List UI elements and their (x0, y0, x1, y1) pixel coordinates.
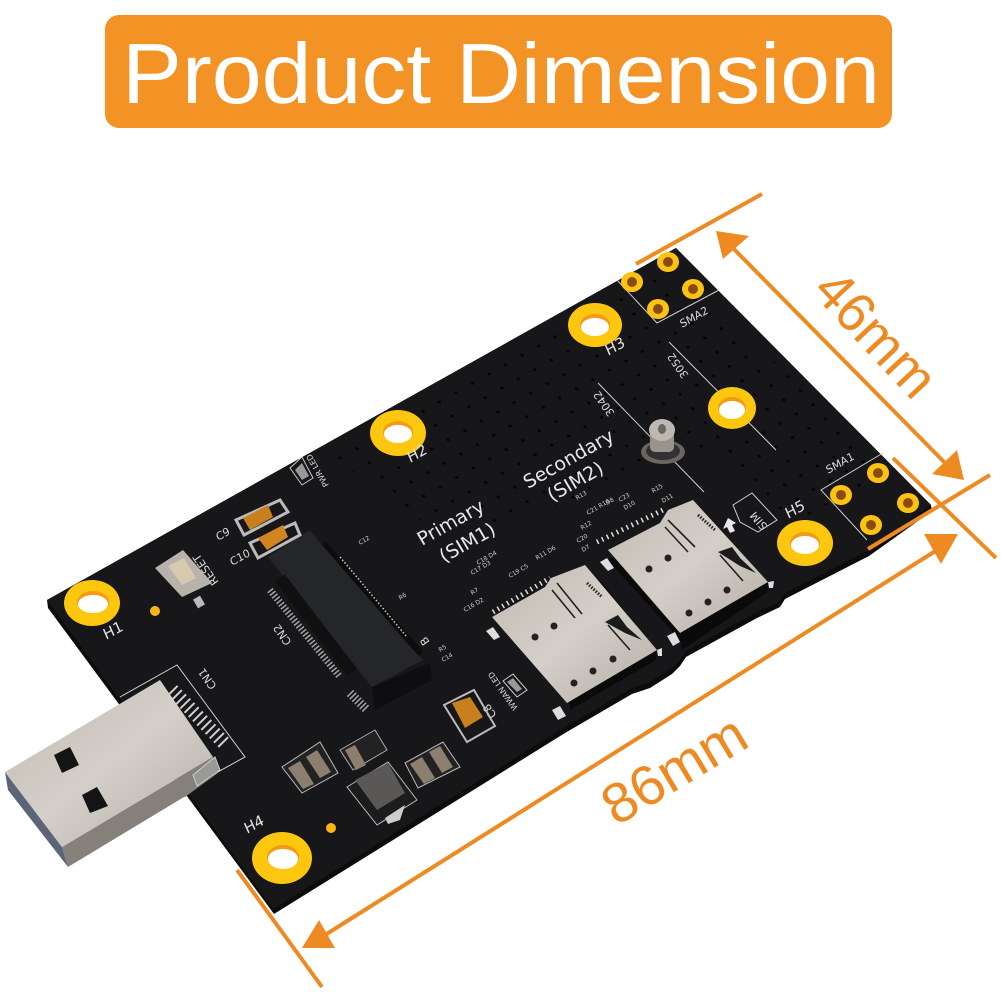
tiny silkscreen component marks: C18 D4 (476, 549, 498, 567)
circuit board (5, 248, 932, 914)
SIM labels: Primary (414, 496, 488, 550)
silkscreen labels: SMA1 (824, 450, 856, 477)
board surface (47, 248, 931, 909)
silkscreen labels: C10 (228, 546, 252, 569)
arrowhead bottom (932, 450, 964, 480)
silkscreen labels: H3 (602, 333, 628, 360)
arrowhead left (302, 920, 335, 948)
small SMD parts (282, 730, 460, 825)
mounting holes (64, 303, 833, 884)
SMA pads (621, 252, 919, 535)
silkscreen labels: 3052 (665, 350, 691, 381)
tiny silkscreen component marks: R6 (398, 592, 408, 602)
silkscreen labels: H4 (241, 811, 267, 838)
dimension: length 86mm (237, 458, 996, 987)
arrowhead right (924, 534, 958, 564)
tiny silkscreen component marks: C16 D2 (462, 596, 485, 614)
tiny silkscreen component marks: D11 (660, 492, 675, 505)
tiny silkscreen component marks: C20 (576, 533, 589, 545)
silkscreen labels: H5 (782, 496, 808, 523)
silkscreen labels: SIM (748, 509, 770, 532)
tiny silkscreen component marks: C17 D3 (470, 559, 492, 577)
tiny silkscreen component marks: C14 (440, 652, 454, 664)
tiny silkscreen component marks: D10 (622, 499, 637, 512)
silkscreen labels: C8 (480, 701, 499, 721)
tiny silkscreen component marks: R5 (438, 644, 448, 654)
tiny silkscreen component marks: C12 (358, 535, 371, 547)
tiny silkscreen component marks: R11 D6 (534, 545, 557, 562)
title banner: Product Dimension (122, 27, 880, 122)
silkscreen labels: SMA2 (678, 304, 710, 331)
tiny silkscreen component marks: R7 (470, 587, 480, 597)
silkscreen lines (120, 280, 883, 790)
silkscreen labels: RESET (190, 551, 221, 588)
silkscreen labels: H1 (100, 617, 126, 644)
SIM labels: (SIM2) (544, 458, 608, 506)
capacitors (236, 457, 527, 742)
SIM labels: (SIM1) (436, 519, 500, 567)
tiny silkscreen component marks: R12 (580, 520, 593, 532)
reset button (155, 550, 212, 608)
SIM slot 2 (600, 500, 774, 650)
right contact row (322, 545, 420, 655)
tiny silkscreen component marks: D8 (604, 496, 615, 507)
tiny silkscreen component marks: C23 (618, 492, 631, 504)
silkscreen labels (100, 304, 856, 838)
dimension: width 46mm: 46mm (802, 257, 950, 410)
silkscreen labels: PWR LED (305, 452, 331, 488)
dimension: width 46mm (636, 194, 990, 549)
tiny silkscreen component marks (358, 483, 675, 664)
standoff screw (641, 419, 685, 464)
M.2 connector (268, 530, 432, 710)
arrowhead top (716, 231, 749, 259)
USB connector (5, 680, 226, 867)
tiny silkscreen component marks: D7 (580, 543, 591, 554)
dimension: length 86mm: 86mm (590, 702, 758, 837)
SIM slot 1 (486, 565, 662, 720)
tiny silkscreen component marks: R15 (650, 483, 664, 495)
board edge thickness (47, 248, 932, 914)
SIM labels (414, 426, 618, 567)
silkscreen labels: CN1 (196, 666, 219, 692)
icon: arrow to SIM (723, 518, 736, 533)
tiny silkscreen component marks: C21 R14 (586, 498, 611, 517)
tiny silkscreen component marks: C19 C5 (508, 563, 530, 580)
silkscreen labels: H2 (404, 440, 430, 467)
silkscreen labels: C9 (214, 525, 232, 544)
SIM labels: Secondary (520, 426, 618, 493)
silkscreen labels: B (417, 634, 432, 648)
silkscreen labels: CN2 (271, 622, 294, 648)
silkscreen labels: 3042 (591, 388, 617, 419)
tiny silkscreen component marks: R13 (574, 490, 588, 502)
silkscreen labels: WWAN LED (486, 670, 520, 712)
